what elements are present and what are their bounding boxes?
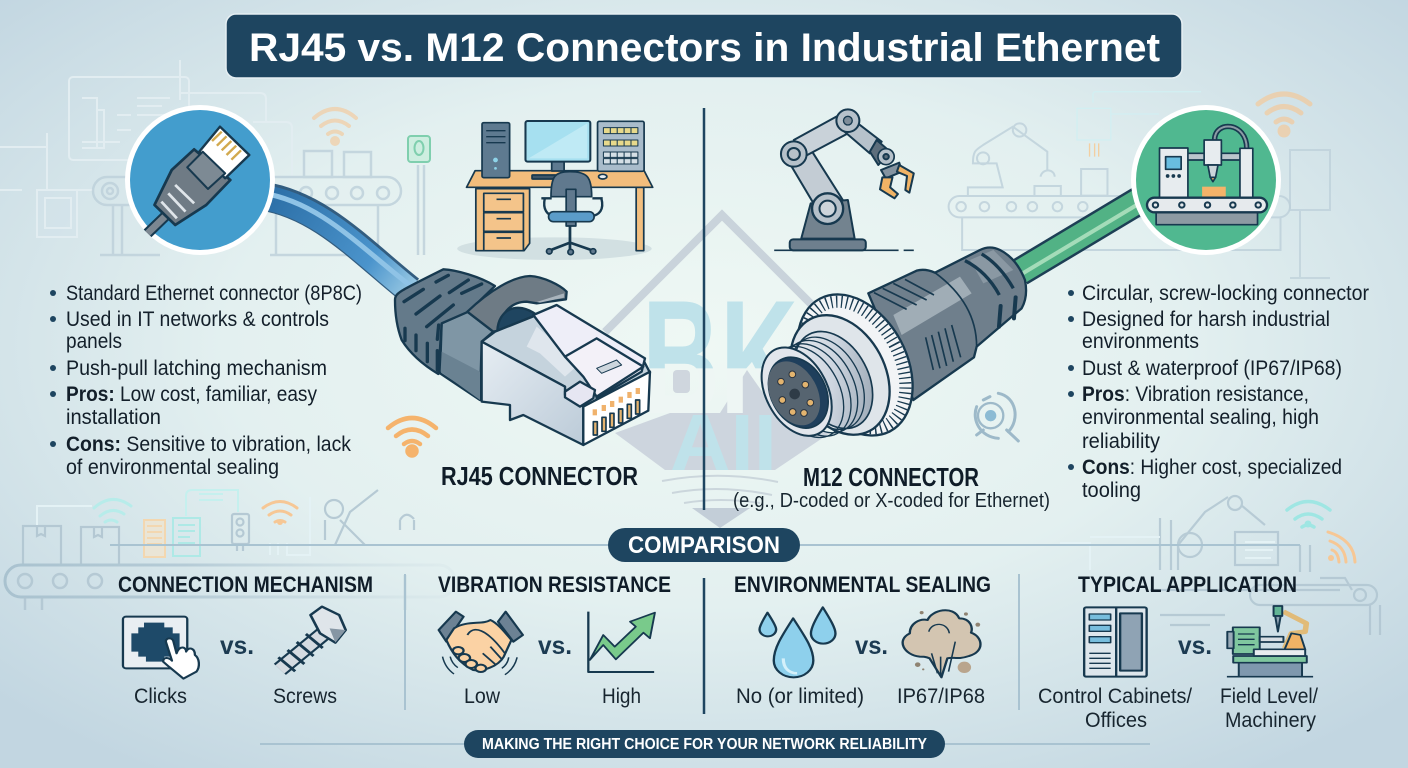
- panel: RJ45 bullet list: Cons: Sensitive to vibration, lack: [66, 433, 351, 456]
- icon: target sensor: [975, 393, 1018, 441]
- icon: blue cable: [262, 193, 412, 291]
- panel: RJ45 bullet list: of environmental sealing: [66, 456, 279, 479]
- icon: faint wifi top right: [1258, 94, 1310, 135]
- label: RJ45 connector: RJ45 CONNECTOR: [441, 461, 638, 491]
- panel: M12 bullet list: Pros: Vibration resistance,: [1082, 383, 1309, 406]
- column: typical application: Field Level/: [1220, 685, 1318, 708]
- panel: RJ45 bullet list: Push-pull latching mechanism: [66, 357, 327, 380]
- column: environmental sealing: No (or limited): [736, 685, 864, 708]
- icon: RJ45 port with pointing hand: [123, 617, 199, 679]
- column: typical application: Control Cabinets/: [1038, 685, 1192, 708]
- background line art: bottom right scene: [1060, 496, 1380, 635]
- column: vibration resistance: VIBRATION RESISTANCE: [438, 572, 671, 597]
- icon: office desk: [457, 121, 653, 260]
- column: connection mechanism: CONNECTION MECHANISM: [118, 572, 373, 597]
- icon: control cabinet: [1084, 607, 1147, 677]
- icon: rising chart: [588, 612, 655, 672]
- panel: RJ45 bullet list: panels: [66, 330, 122, 353]
- title banner: [226, 14, 1182, 78]
- column: typical application: TYPICAL APPLICATION: [1078, 572, 1297, 597]
- column: typical application: [1038, 572, 1318, 732]
- icon: orange wifi near connector: [388, 418, 436, 456]
- column: environmental sealing: ENVIRONMENTAL SEALING: [734, 572, 991, 597]
- icon: blue RJ45 circle: [125, 105, 275, 255]
- label: M12 connector: [733, 462, 1050, 512]
- column: connection mechanism: [118, 572, 373, 708]
- panel: RJ45 bullet list: [50, 282, 362, 479]
- panel: M12 bullet list: reliability: [1082, 430, 1160, 453]
- watermark: AII: [670, 398, 777, 487]
- column: typical application: vs.: [1178, 632, 1212, 660]
- icon: robot arm: [774, 109, 914, 250]
- column: typical application: Offices: [1085, 709, 1147, 732]
- panel: M12 bullet list: tooling: [1082, 479, 1141, 502]
- panel: M12 bullet list: Circular, screw-locking connector: [1082, 282, 1369, 305]
- icon: green cable: [1020, 200, 1140, 275]
- footer banner: MAKING THE RIGHT CHOICE FOR YOUR NETWORK RELIABILITY: [482, 736, 927, 753]
- icon: RJ45 connector: [395, 269, 650, 445]
- icon: green CNC machine circle: [1131, 105, 1281, 255]
- icon: water drops: [760, 607, 835, 677]
- footer banner: [260, 730, 1150, 758]
- panel: M12 bullet list: environmental sealing, high: [1082, 406, 1319, 429]
- background shapes: right edge machine: [1290, 150, 1330, 278]
- panel: M12 bullet list: Dust & waterproof (IP67/IP68): [1082, 357, 1342, 380]
- panel: RJ45 bullet list: Used in IT networks & controls: [66, 308, 329, 331]
- title banner: RJ45 vs. M12 Connectors in Industrial Ethernet: [249, 26, 1160, 70]
- panel: RJ45 bullet list: Pros: Low cost, familiar, easy: [66, 383, 317, 406]
- comparison header: [110, 528, 1300, 562]
- center divider: [703, 108, 705, 714]
- column: typical application: Machinery: [1225, 709, 1316, 732]
- column: vibration resistance: vs.: [538, 632, 572, 660]
- background line art: top left scene: [0, 60, 424, 255]
- watermark: [605, 215, 830, 528]
- icon: faint wifi top left: [314, 109, 356, 144]
- icon: field machinery: [1227, 606, 1313, 677]
- column: environmental sealing: [734, 572, 991, 708]
- panel: M12 bullet list: environments: [1082, 330, 1199, 353]
- watermark: BK: [642, 267, 798, 448]
- column dividers: [405, 574, 1019, 710]
- panel: M12 bullet list: Cons: Higher cost, specialized: [1082, 456, 1342, 479]
- icon: green wall sign: [408, 136, 430, 162]
- icon: shaking handshake: [439, 612, 523, 675]
- label: M12 connector: M12 CONNECTOR: [803, 462, 979, 492]
- icon: screw: [278, 607, 346, 671]
- background line art: top right scene: [949, 92, 1290, 250]
- icon: M12 connector: [747, 247, 1026, 455]
- panel: M12 bullet list: Designed for harsh industrial: [1082, 308, 1330, 331]
- column: connection mechanism: vs.: [220, 632, 254, 660]
- panel: RJ45 bullet list: Standard Ethernet connector (8P8C): [66, 282, 362, 305]
- comparison header: COMPARISON: [628, 532, 780, 559]
- icon: dust cloud: [903, 610, 980, 677]
- column: environmental sealing: vs.: [855, 632, 888, 660]
- column: vibration resistance: High: [602, 685, 641, 708]
- column: connection mechanism: Screws: [273, 685, 337, 708]
- column: connection mechanism: Clicks: [134, 685, 187, 708]
- column: vibration resistance: Low: [464, 685, 501, 708]
- panel: M12 bullet list: [1068, 282, 1369, 502]
- column: vibration resistance: [438, 572, 671, 708]
- background line art: bottom left scene: [5, 490, 455, 610]
- column: environmental sealing: IP67/IP68: [897, 685, 985, 708]
- label: M12 connector: (e.g., D-coded or X-coded for Ethernet): [733, 490, 1050, 512]
- icons: small wifi bottom band: [94, 499, 1355, 562]
- panel: RJ45 bullet list: installation: [66, 406, 161, 429]
